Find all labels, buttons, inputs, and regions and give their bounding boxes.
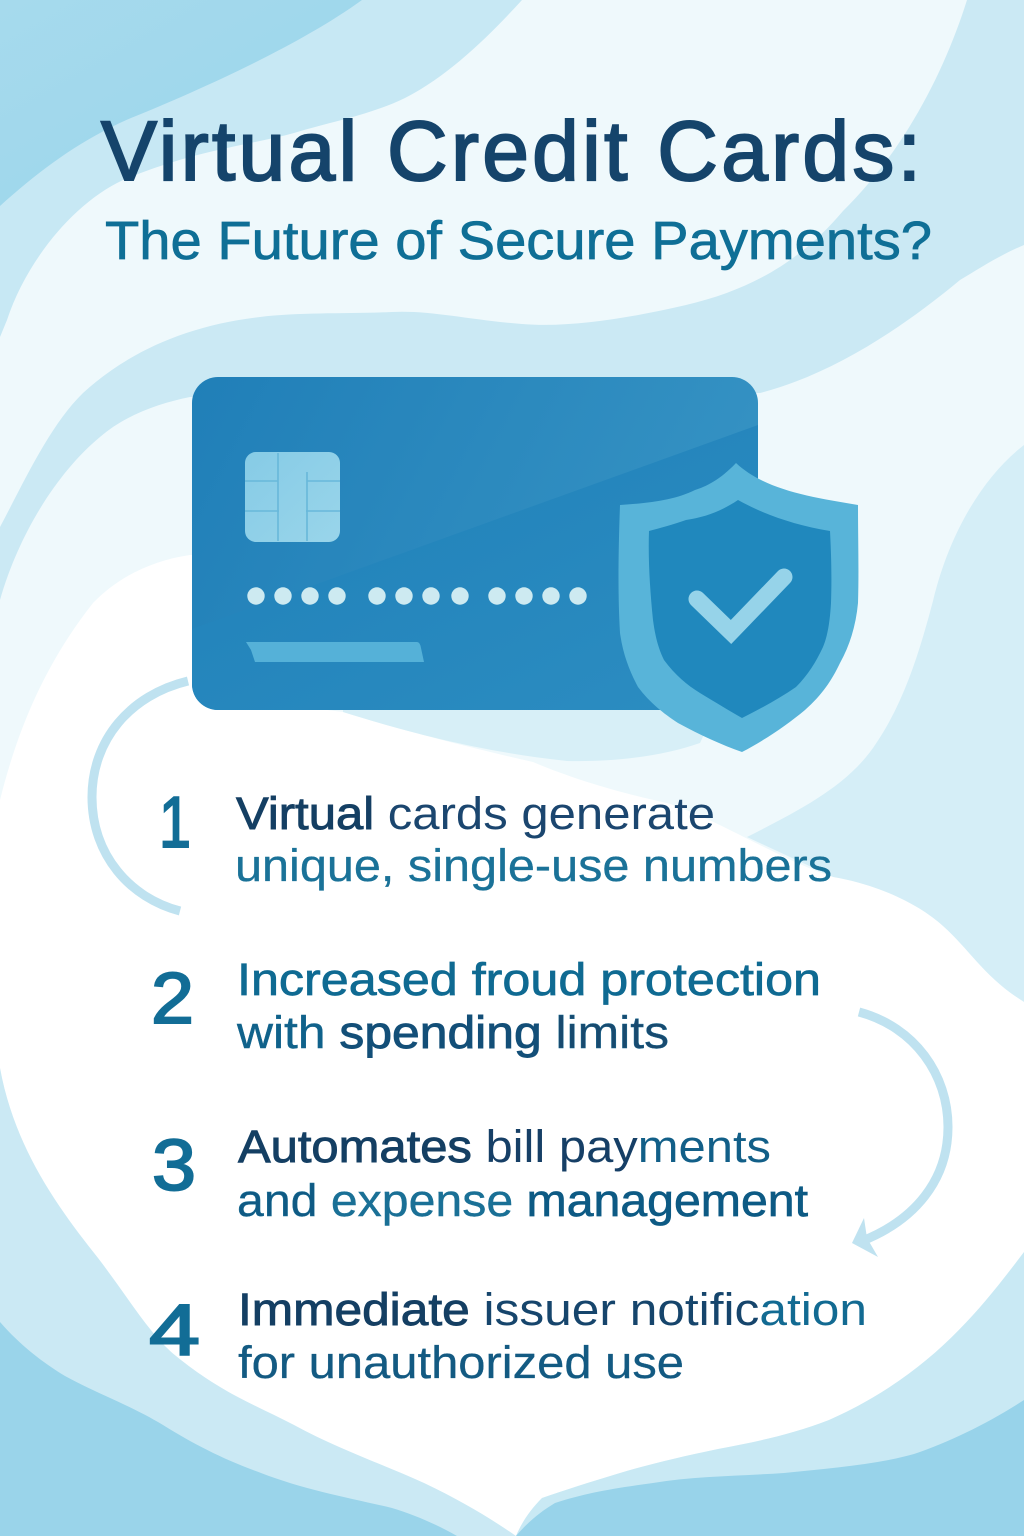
list item 3 bbox=[152, 1121, 809, 1226]
item 2 text: Increased froud protection bbox=[237, 954, 821, 1005]
number 3: 3 bbox=[152, 1126, 196, 1206]
item 2 text: with spending limits bbox=[236, 1007, 669, 1058]
number 1: 1 bbox=[159, 783, 191, 863]
illustration: credit card bbox=[192, 377, 758, 710]
item 3 text: and expense management bbox=[237, 1175, 809, 1226]
icon: security shield with check mark bbox=[618, 463, 858, 752]
card name strip bbox=[246, 642, 424, 662]
card number dots bbox=[247, 587, 587, 605]
item 3 text bbox=[237, 1121, 809, 1226]
number 4: 4 bbox=[149, 1291, 200, 1371]
subtitle: The Future of Secure Payments? bbox=[105, 211, 932, 271]
item 1 text bbox=[235, 788, 832, 891]
item 4 text bbox=[238, 1284, 867, 1388]
icon: connector arc left bbox=[92, 681, 188, 911]
item 4 text: for unauthorized use bbox=[238, 1337, 684, 1388]
list item 1 bbox=[159, 783, 832, 891]
title: Virtual Credit Cards: bbox=[101, 104, 921, 198]
arrow: curved connector right bbox=[852, 1012, 948, 1257]
item 2 text bbox=[236, 954, 821, 1058]
item 4 text: Immediate issuer notific ation bbox=[238, 1284, 867, 1335]
item 3 text: Automates bill pay ments bbox=[238, 1121, 771, 1172]
item 1 text: Virtual cards generate bbox=[236, 788, 715, 839]
card lower diagonal panel bbox=[192, 425, 758, 710]
check mark bbox=[697, 577, 784, 632]
card chip bbox=[245, 452, 340, 542]
list item 2 bbox=[151, 954, 821, 1058]
number 2: 2 bbox=[151, 959, 194, 1039]
list item 4 bbox=[149, 1284, 867, 1388]
item 1 text: unique, single-use numbers bbox=[235, 840, 832, 891]
